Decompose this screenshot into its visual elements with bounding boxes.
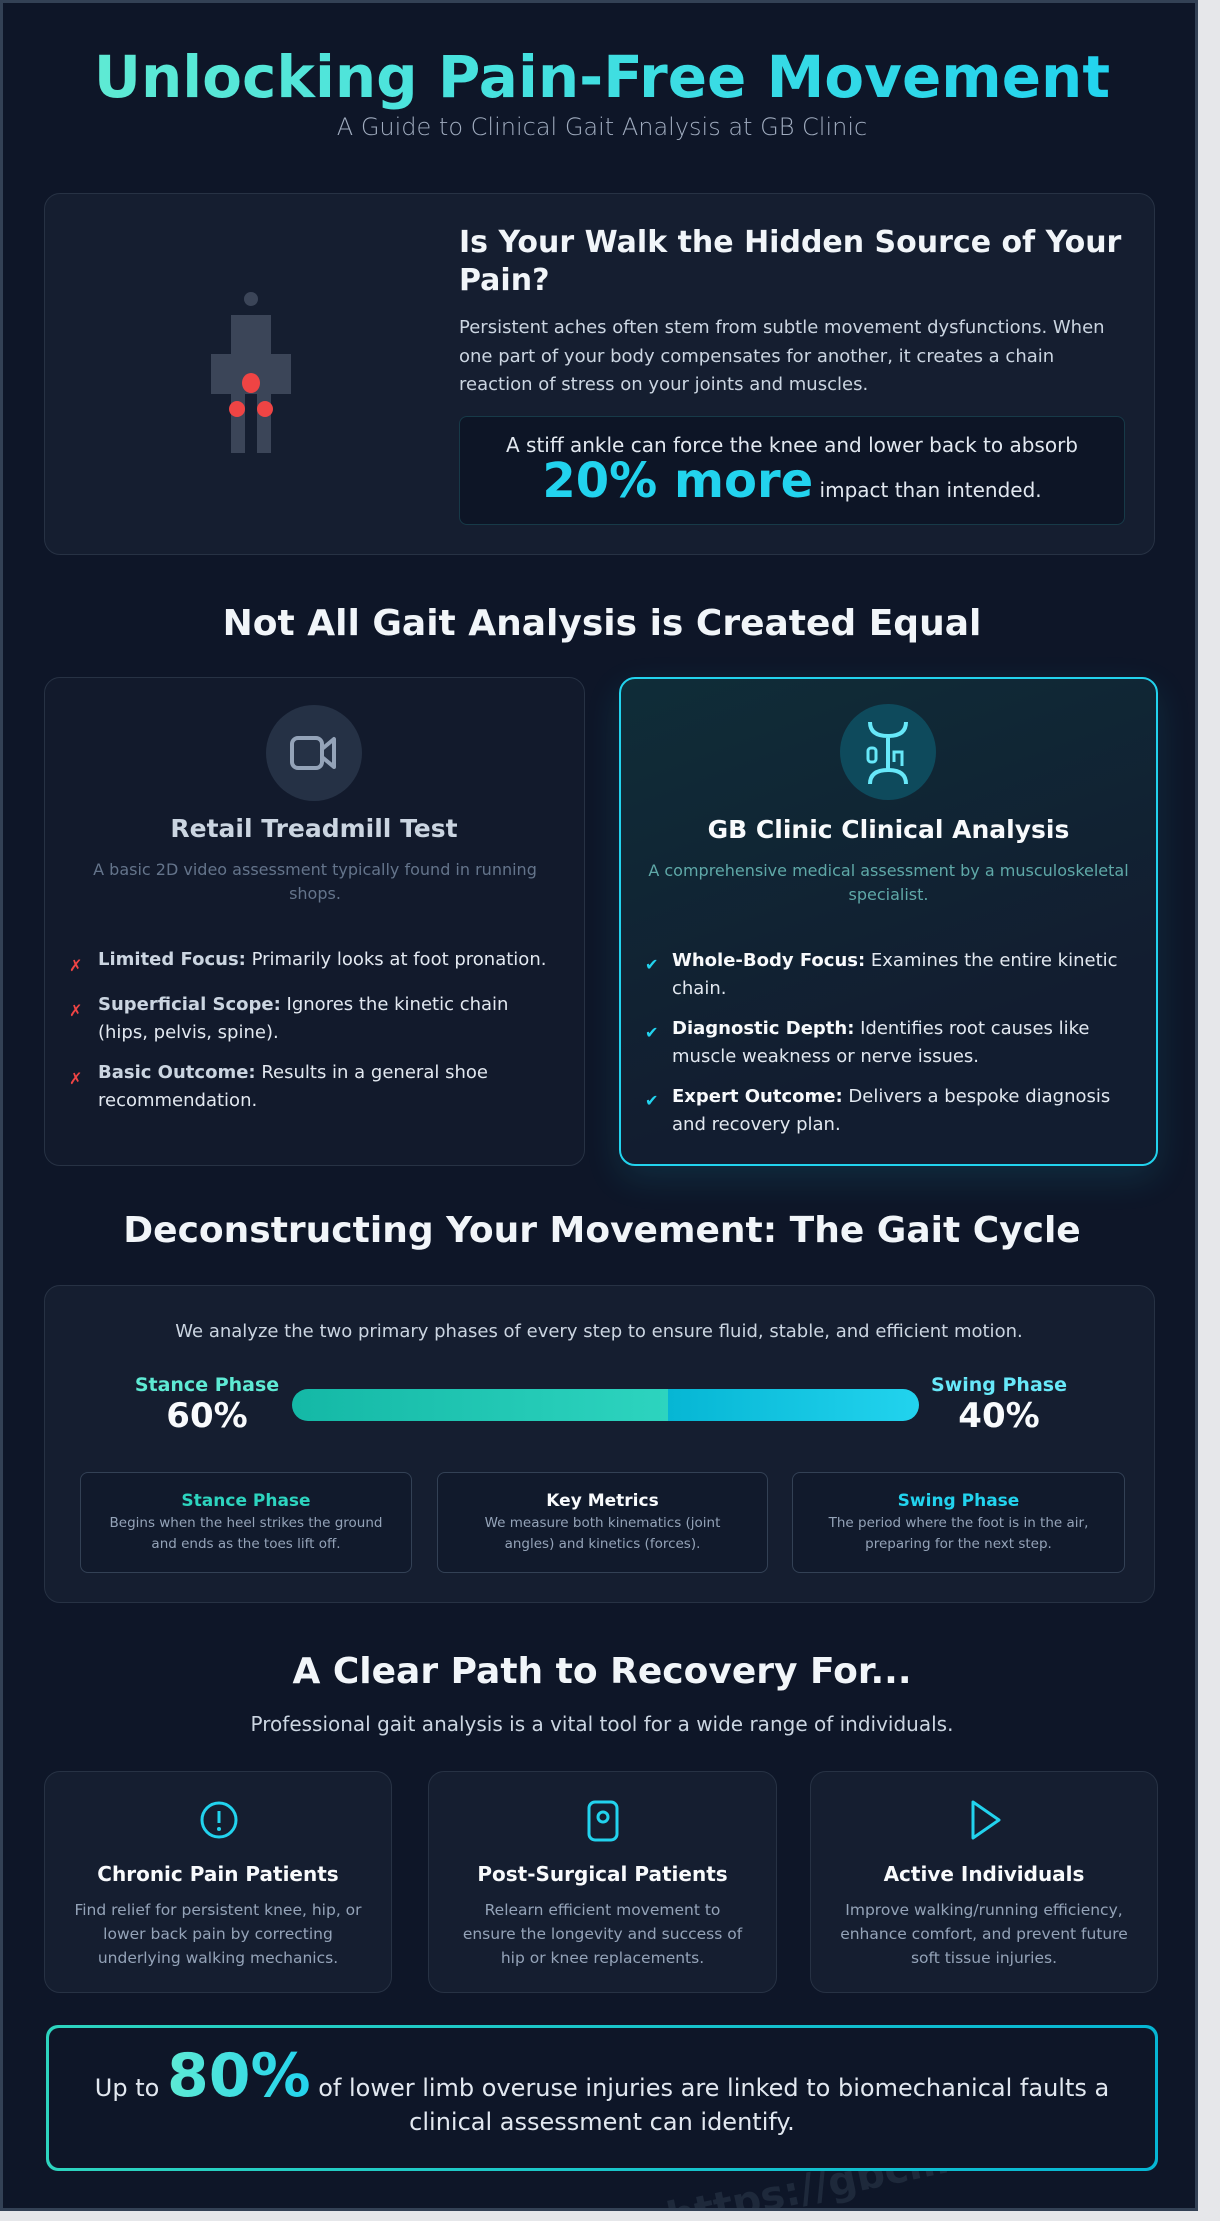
box: swing phase: Swing Phase <box>898 1491 1019 1511</box>
icon: alert circle <box>200 1802 238 1838</box>
icon: clinical analysis <box>840 704 936 800</box>
box: key metrics: Key Metrics <box>546 1491 659 1511</box>
box: swing phase: preparing for the next step. <box>865 1536 1052 1552</box>
card title: Retail Treadmill Test <box>170 814 458 843</box>
box: stance phase: and ends as the toes lift off. <box>151 1536 341 1552</box>
list: limitations: ✗ <box>69 1001 82 1020</box>
title: Unlocking Pain-Free Movement <box>94 43 1110 111</box>
list: benefits: ✔ <box>645 1023 658 1042</box>
callout: 80% stat <box>46 2025 1158 2171</box>
list: benefits: ✔ <box>645 955 658 974</box>
intro text: We analyze the two primary phases of every step to ensure fluid, stable, and efficient motion. <box>175 1321 1023 1342</box>
card: active individuals: Improve walking/running efficiency, enhance comfort, and prevent future soft tissue injuries. <box>840 1901 1128 1967</box>
card: post-surgical <box>428 1771 777 1993</box>
heading: clear path: A Clear Path to Recovery For... <box>292 1651 912 1692</box>
list: limitations: Superficial Scope: Ignores the kinetic chain (hips, pelvis, spine). <box>98 994 508 1043</box>
card description: A basic 2D video assessment typically found in running shops. <box>93 860 537 903</box>
card: post-surgical: Relearn efficient movement to ensure the longevity and success of hip or knee replacements. <box>463 1901 742 1967</box>
card description: A comprehensive medical assessment by a musculoskeletal specialist. <box>648 861 1129 904</box>
icon: device <box>588 1800 618 1842</box>
box: stance phase: Stance Phase <box>181 1491 311 1511</box>
callout: 20% more <box>459 416 1125 525</box>
box: swing phase: The period where the foot is in the air, <box>829 1515 1088 1531</box>
stance label: Stance Phase <box>135 1374 279 1396</box>
list: limitations: Basic Outcome: Results in a general shoe recommendation. <box>98 1062 488 1111</box>
callout: 80% stat: clinical assessment can identify. <box>409 2108 795 2136</box>
callout: 80% stat: Up to 80% of lower limb overuse injuries are linked to biomechanical faults a <box>95 2041 1109 2111</box>
box: key metrics: angles) and kinetics (forces). <box>505 1536 700 1552</box>
panel: hidden source of pain <box>44 193 1155 555</box>
card: chronic pain: Find relief for persistent knee, hip, or lower back pain by correcting underlying walking mechanics. <box>74 1901 362 1967</box>
callout: 20% more: 20% more impact than intended. <box>542 453 1042 509</box>
heading: Is Your Walk the Hidden Source of Your Pain? <box>459 225 1121 298</box>
list: limitations: ✗ <box>69 1069 82 1088</box>
list: benefits: Diagnostic Depth: Identifies root causes like muscle weakness or nerve issues. <box>672 1018 1089 1067</box>
icon: video camera <box>266 705 362 801</box>
list: limitations <box>69 949 546 1111</box>
card: post-surgical: Post-Surgical Patients <box>477 1862 728 1886</box>
card title: GB Clinic Clinical Analysis <box>708 815 1069 844</box>
swing label: 40% <box>958 1396 1040 1436</box>
box: stance phase <box>80 1472 412 1573</box>
heading: gait cycle: Deconstructing Your Movement: The Gait Cycle <box>123 1210 1081 1251</box>
card: chronic pain: Chronic Pain Patients <box>97 1862 339 1886</box>
box: stance phase: Begins when the heel strikes the ground <box>110 1515 382 1531</box>
swing label: Swing Phase <box>931 1374 1067 1396</box>
swing label <box>931 1374 1067 1436</box>
subtitle: A Guide to Clinical Gait Analysis at GB Clinic <box>337 113 867 141</box>
box: key metrics: We measure both kinematics (joint <box>485 1515 720 1531</box>
icon: human figure with pain points <box>211 292 291 453</box>
panel: gait cycle <box>44 1285 1155 1603</box>
card: active individuals: Active Individuals <box>884 1862 1084 1886</box>
card: active individuals <box>810 1771 1158 1993</box>
callout: 20% more: A stiff ankle can force the knee and lower back to absorb <box>506 433 1078 457</box>
panel: retail treadmill test <box>44 677 585 1166</box>
list: benefits <box>645 950 1118 1135</box>
list: limitations: ✗ <box>69 956 82 975</box>
paragraph: Persistent aches often stem from subtle movement dysfunctions. When one part of your body compensates for another, it creates a chain reaction of stress on your joints and muscles. <box>459 317 1105 395</box>
card: chronic pain <box>44 1771 392 1993</box>
box: swing phase <box>792 1472 1125 1573</box>
subheading: Professional gait analysis is a vital tool for a wide range of individuals. <box>251 1712 953 1736</box>
panel: GB clinic clinical analysis <box>619 677 1158 1166</box>
icon: play arrow <box>972 1800 1001 1840</box>
heading: not all gait analysis: Not All Gait Analysis is Created Equal <box>223 603 981 644</box>
list: benefits: ✔ <box>645 1091 658 1110</box>
stance label: 60% <box>166 1396 248 1436</box>
stance label <box>135 1374 279 1436</box>
list: benefits: Whole-Body Focus: Examines the entire kinetic chain. <box>672 950 1118 999</box>
list: limitations: Limited Focus: Primarily looks at foot pronation. <box>98 949 546 970</box>
list: benefits: Expert Outcome: Delivers a bespoke diagnosis and recovery plan. <box>672 1086 1110 1135</box>
bar chart: gait split <box>292 1389 919 1421</box>
box: key metrics <box>437 1472 768 1573</box>
